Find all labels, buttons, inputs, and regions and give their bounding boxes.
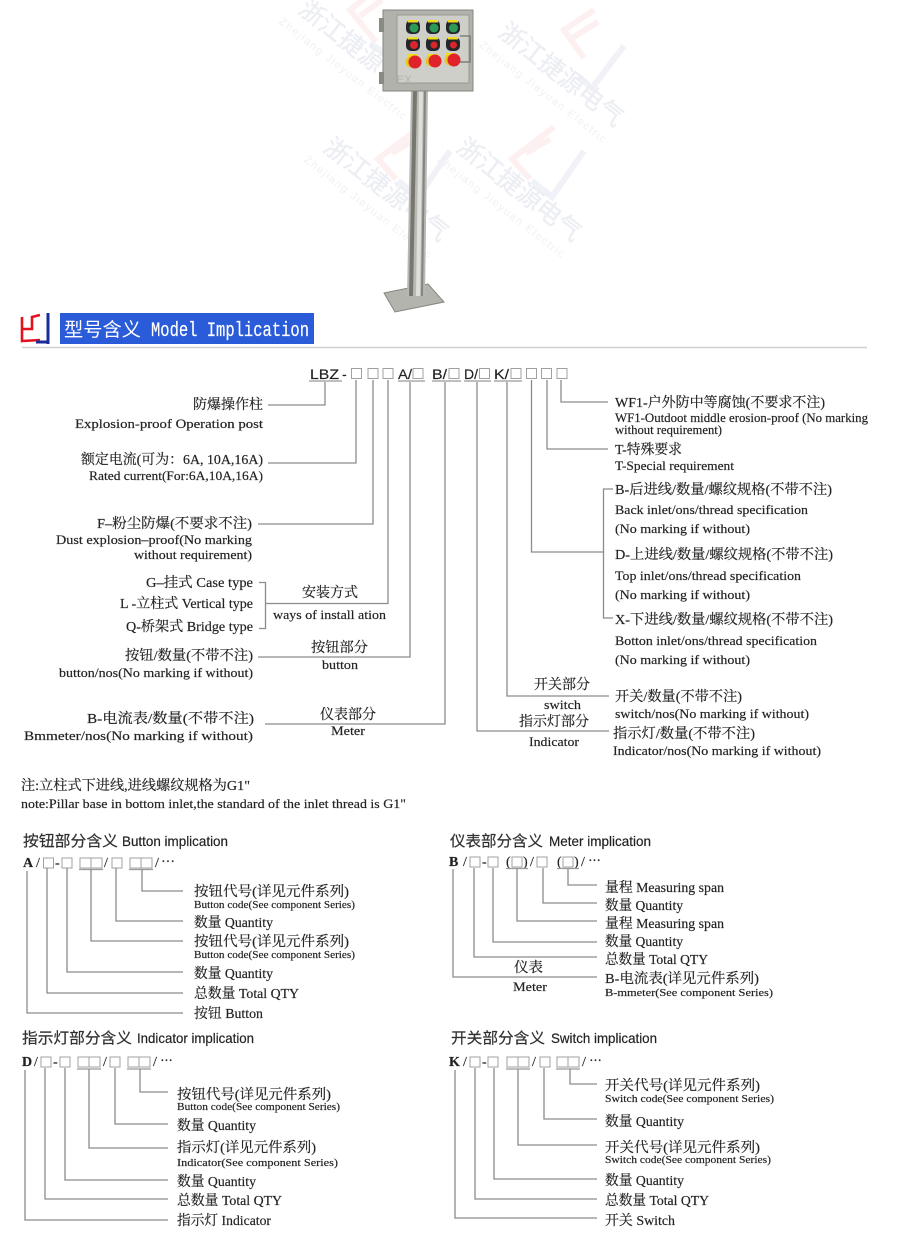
callout: meter [24,382,445,743]
callout: switch [507,382,809,721]
callout: outdoor corrosion proof: without requirement) [615,422,722,437]
callout: indicator: 指示灯部分 [519,713,589,730]
leader lines and labels: 指示灯 Indicator [177,1212,271,1229]
leader lines and labels: 指示灯(详见元件系列) [177,1139,316,1156]
code formula: - [482,855,487,870]
watermarks: 浙江捷源电气 [451,133,587,247]
leader lines and labels: 总数量 Total QTY [605,951,708,968]
panel: meter implication [449,833,773,999]
callout: indicator: Indicator [529,734,580,749]
heading [451,1030,657,1047]
leader lines and labels: 开关代号(详见元件系列) [605,1078,760,1094]
callout: inlet specifications: X-下进线/数量/螺纹规格(不带不注) [615,611,833,628]
code formula: ) [574,855,579,870]
leader lines and labels: 总数量 Total QTY [177,1192,282,1209]
callout: inlet specifications: B-后进线/数量/螺纹规格(不带不注) [615,481,832,498]
enclosure [383,10,473,91]
callout: explosion-proof operation post: 防爆操作柱 [193,396,263,413]
leader lines and labels: 数量 Quantity [605,1113,684,1130]
leader lines and labels [27,868,355,1022]
leader lines and labels: Button code(See component Series) [177,1101,340,1113]
leader lines and labels: 数量 Quantity [177,1173,256,1190]
callout: switch: switch [544,697,582,712]
code formula: A [23,856,34,871]
watermarks [277,0,629,261]
callout: indicator: 指示灯/数量(不带不注) [613,725,755,742]
heading bar: 型号含义 [64,315,141,342]
callout: outdoor corrosion proof: WF1-户外防中等腐蚀(不要求不注) [615,394,825,411]
leader lines and labels: 仪表 [514,959,543,976]
heading: 指示灯部分含义 [22,1030,132,1047]
product photo: explosion-proof operation post: EX [397,74,412,86]
code formula: / [36,856,40,871]
leader lines and labels: 按钮代号(详见元件系列) [177,1086,331,1103]
callout: rated current: Rated current(For:6A,10A,16A) [89,468,263,483]
code formula: ··· [161,855,175,870]
callout: ways of installation [120,380,388,635]
code formula: ··· [588,854,601,869]
leader lines and labels: B-mmeter(See component Series) [605,987,773,999]
model code formula: B/ [432,366,447,382]
callout: explosion-proof operation post: Explosion-proof Operation post [75,416,263,431]
code formula: K [449,1055,460,1070]
heading [23,833,228,850]
code formula: ··· [589,1054,602,1069]
code formula: / [103,1055,107,1070]
callout: meter: Meter [331,723,366,738]
callout: ways of installation: ways of install ation [273,607,387,622]
heading: 仪表部分含义 [450,833,543,850]
heading [22,1030,254,1047]
leader lines and labels: 总数量 Total QTY [605,1192,709,1209]
code formula: / [153,1055,157,1070]
leader lines and labels: 数量 Quantity [605,1172,684,1189]
heading bar [60,313,314,344]
heading bar: Model Implication [151,320,309,343]
model code formula: - [342,366,347,382]
watermarks: Zhejiang Jieyuan Electric [477,39,609,146]
heading: 开关部分含义 [451,1030,545,1047]
leader lines and labels: 按钮 Button [194,1005,263,1022]
code formula: / [582,1055,586,1070]
code formula: / [34,1055,38,1070]
callout: outdoor corrosion proof [561,380,868,437]
heading [450,833,651,850]
leader lines and labels [455,1068,774,1229]
leader lines and labels: Meter [513,979,548,994]
callout: inlet specifications: (No marking if without) [615,587,750,602]
model code formula: A/ [398,366,412,382]
icon: company logo [22,313,48,344]
leader lines and labels: 数量 Quantity [194,914,273,931]
panel: indicator implication [22,1030,340,1229]
leader lines and labels: Button code(See component Series) [194,949,355,961]
callout: dust explosion proof: without requirement) [134,547,252,562]
callout: rated current [81,380,356,483]
leader lines and labels: 数量 Quantity [177,1117,256,1134]
callout: inlet specifications: Botton inlet/ons/thread specification [615,633,818,648]
leader lines and labels [25,1068,340,1229]
heading: Button implication [122,833,228,849]
callout: special requirement [547,380,734,473]
code formula: ( [557,855,562,870]
callout: switch: switch/nos(No marking if without) [615,706,809,721]
callout: inlet specifications: Top inlet/ons/thread specification [615,568,802,583]
callout: meter: B-电流表/数量(不带不注) [87,710,254,727]
callout: explosion-proof operation post [75,382,325,431]
code formula [22,1054,173,1070]
callout: outdoor corrosion proof: WF1-Outdoot middle erosion-proof (No marking [615,410,868,425]
code formula: - [53,1055,58,1070]
callout: switch: 开关/数量(不带不注) [615,688,742,705]
model code formula: K/ [494,366,509,382]
callout: button: button [322,657,359,672]
leader lines and labels [453,868,773,999]
code formula: D [22,1055,32,1070]
leader lines and labels: Indicator(See component Series) [177,1157,338,1169]
leader lines and labels: B-电流表(详见元件系列) [605,970,759,987]
leader lines and labels: Switch code(See component Series) [605,1154,771,1166]
callout: button: 按钮部分 [311,639,368,656]
watermarks: 浙江捷源电气 [318,133,454,247]
code formula: / [463,1055,467,1070]
callout: special requirement: T-Special requirement [615,458,734,473]
callout: inlet specifications: (No marking if without) [615,652,750,667]
callout: inlet specifications: Back inlet/ons/thread specification [615,502,809,517]
leader lines and labels: 按钮代号(详见元件系列) [194,933,349,950]
callout: dust explosion proof: F–粉尘防爆(不要求不注) [97,515,252,532]
callout: dust explosion proof: Dust explosion–proof(No marking [56,532,253,547]
callout: ways of installation: G–挂式 Case type [146,574,253,591]
model code formula [309,366,567,382]
callout: ways of installation: Q-桥架式 Bridge type [126,618,253,635]
model code formula: LBZ [310,366,339,382]
watermarks: Zhejiang Jieyuan Electric [302,154,434,261]
callout: ways of installation: L -立柱式 Vertical type [120,595,253,612]
heading: Switch implication [551,1030,657,1046]
callout: dust explosion proof [56,380,373,562]
indicator lights and buttons [406,20,460,68]
leader lines and labels: Button code(See component Series) [194,899,355,911]
watermarks: Zhejiang Jieyuan Electric [277,16,409,123]
code formula: ··· [160,1054,173,1069]
callout: inlet specifications: (No marking if without) [615,521,750,536]
code formula: ( [506,855,511,870]
code formula: / [463,855,467,870]
heading: Meter implication [549,833,651,849]
section heading: model implication [22,313,867,348]
callout: meter: 仪表部分 [320,706,376,723]
code formula: - [55,856,60,871]
pole [407,90,428,296]
callout: special requirement: T-特殊要求 [615,441,682,458]
leader lines and labels: 数量 Quantity [605,933,683,950]
panel: button implication [23,833,355,1022]
note: pillar base inlet [21,777,406,811]
leader lines and labels: 开关 Switch [605,1213,675,1229]
leader lines and labels: 量程 Measuring span [605,916,724,932]
code formula: / [581,855,585,870]
code formula [449,1054,602,1070]
model code formula: D/ [464,366,478,382]
callout: inlet specifications [532,380,833,667]
callout: meter: Bmmeter/nos(No marking if without) [24,728,253,743]
watermarks: Zhejiang Jieyuan Electric [435,154,567,261]
callout: button: 按钮/数量(不带不注) [125,647,253,664]
product photo: explosion-proof operation post [379,10,473,312]
watermarks: 浙江捷源电气 [493,18,629,132]
code formula [23,855,175,871]
leader lines and labels: 数量 Quantity [194,965,273,982]
heading: 按钮部分含义 [23,833,118,850]
code formula: / [155,856,159,871]
base plate [384,284,444,312]
panel: switch implication [449,1030,774,1229]
leader lines and labels: 数量 Quantity [605,897,683,914]
code formula: B [449,855,458,870]
note: pillar base inlet: note:Pillar base in bottom inlet,the standard of the inlet thread is G1" [21,796,406,811]
code formula: ) [523,855,528,870]
callout: button: button/nos(No marking if without) [59,665,253,680]
heading: Indicator implication [137,1030,254,1046]
leader lines and labels: 量程 Measuring span [605,880,724,896]
callout: indicator [477,382,821,758]
leader lines and labels: 总数量 Total QTY [194,985,299,1002]
code formula: / [104,856,108,871]
leader lines and labels: 按钮代号(详见元件系列) [194,883,349,900]
callout: indicator: Indicator/nos(No marking if without) [613,743,821,758]
leader lines and labels: 开关代号(详见元件系列) [605,1140,760,1156]
callout: inlet specifications: D-上进线/数量/螺纹规格(不带不注) [615,546,833,563]
code formula: / [532,1055,536,1070]
note: pillar base inlet: 注:立柱式下进线,进线螺纹规格为G1" [21,777,250,794]
callout: button [59,382,410,680]
leader lines and labels: Switch code(See component Series) [605,1093,774,1105]
callout: rated current: 额定电流(可为：6A, 10A,16A) [81,451,263,468]
code formula: / [530,855,534,870]
callout: ways of installation: 安装方式 [302,584,358,601]
callout: switch: 开关部分 [534,677,590,693]
code formula [449,854,601,870]
code formula: - [482,1055,487,1070]
